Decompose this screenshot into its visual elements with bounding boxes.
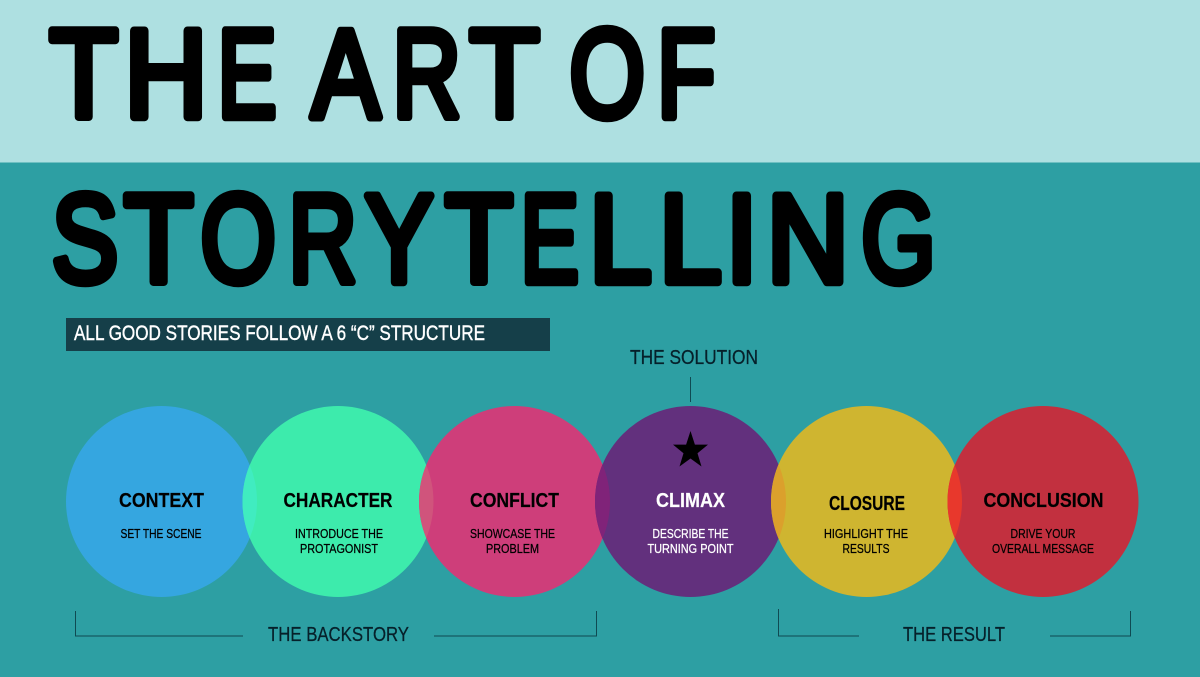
circle: conflict: SHOWCASE THE: [470, 527, 555, 541]
title: O: [200, 170, 276, 309]
title: R: [392, 5, 461, 144]
circle: context: [66, 406, 257, 597]
title: F: [657, 5, 716, 144]
subtitle banner: [66, 318, 550, 351]
circle: climax: CLIMAX: [656, 490, 726, 512]
circle: conclusion: CONCLUSION: [984, 490, 1104, 512]
circle: character: PROTAGONIST: [300, 542, 378, 556]
bracket: the backstory: THE BACKSTORY: [268, 624, 409, 646]
bracket: the result: [778, 609, 1130, 646]
circle: closure: [771, 406, 962, 597]
title: L: [589, 170, 652, 309]
title: G: [861, 170, 936, 309]
circle: character: CHARACTER: [284, 490, 393, 512]
circle: closure: RESULTS: [842, 542, 890, 556]
circle: closure: HIGHLIGHT THE: [824, 527, 908, 541]
title: R: [288, 170, 357, 309]
subtitle banner: ALL GOOD STORIES FOLLOW A 6 “C” STRUCTURE: [74, 322, 485, 345]
title: S: [52, 170, 118, 309]
title: T: [124, 170, 193, 309]
circle: conflict: CONFLICT: [470, 490, 559, 512]
title: L: [659, 170, 722, 309]
circle: climax: TURNING POINT: [648, 542, 734, 556]
circle: conclusion: DRIVE YOUR: [1010, 527, 1076, 541]
title: Y: [365, 170, 433, 309]
top title band: [0, 0, 1200, 162]
title: T: [470, 5, 538, 144]
label: the solution: THE SOLUTION: [630, 347, 758, 369]
circle: climax: DESCRIBE THE: [652, 527, 728, 541]
circle: climax: [595, 406, 786, 597]
label: the solution: [630, 347, 758, 402]
circle: conflict: [419, 406, 610, 597]
icon: star: [673, 431, 708, 466]
title: H: [124, 5, 208, 144]
title: E: [520, 170, 579, 309]
bracket: the result: THE RESULT: [903, 624, 1005, 646]
circle: character: [242, 406, 434, 597]
title: A: [311, 5, 380, 144]
title: N: [767, 170, 849, 309]
title: T: [445, 170, 513, 309]
title: O: [570, 5, 645, 144]
title: [50, 5, 936, 309]
circle: conflict: PROBLEM: [486, 542, 539, 556]
circle: context: CONTEXT: [119, 490, 204, 512]
bracket: the backstory: [76, 611, 596, 646]
circle: closure: CLOSURE: [829, 493, 905, 515]
title: T: [50, 5, 118, 144]
circle: context: SET THE SCENE: [120, 527, 202, 541]
title: E: [218, 5, 277, 144]
lower teal background: [0, 162, 1200, 677]
title: I: [726, 170, 758, 309]
circle: conclusion: OVERALL MESSAGE: [992, 542, 1094, 556]
circle: character: INTRODUCE THE: [295, 527, 383, 541]
circle: conclusion: [948, 406, 1138, 597]
